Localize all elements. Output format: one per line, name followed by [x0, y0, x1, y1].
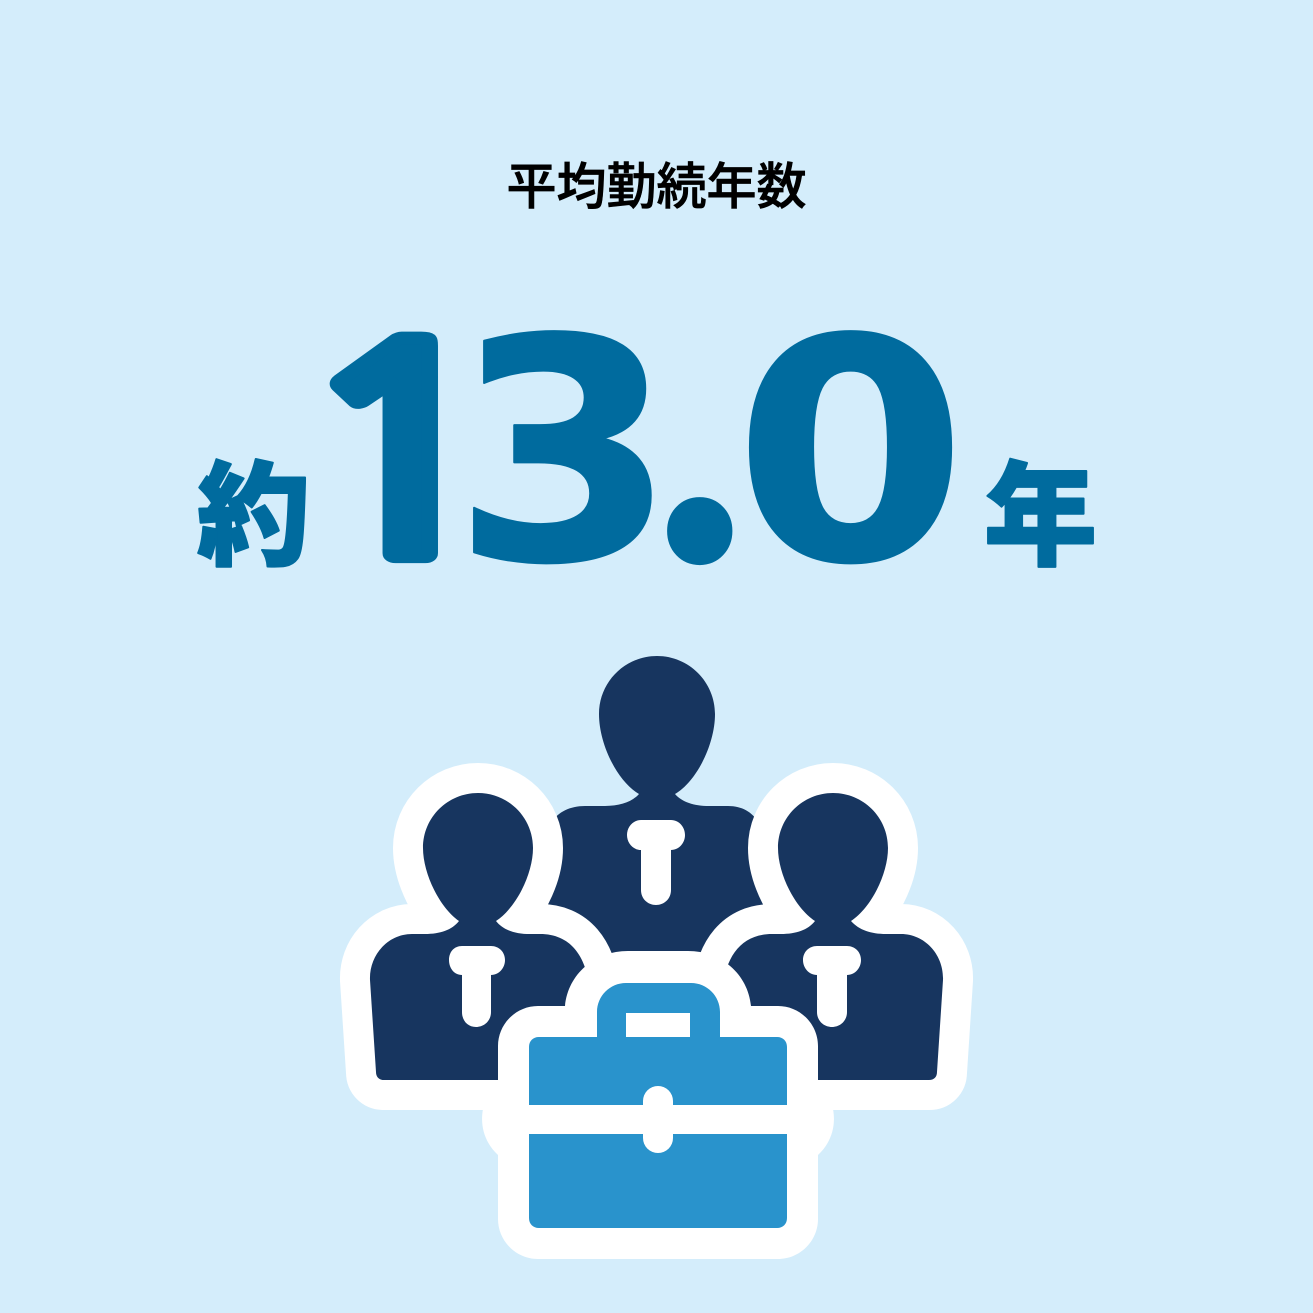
headline value: about 13.0 years — [197, 218, 1097, 644]
person: front left — [370, 793, 590, 1080]
title: 平均勤続年数 — [506, 159, 806, 215]
number: 13.0: 1 — [290, 315, 514, 600]
icon: briefcase — [482, 951, 834, 1259]
number: 13.0: . — [648, 218, 751, 644]
person: back centre — [540, 656, 770, 960]
person: front right — [722, 793, 943, 1080]
number: 13.0: 0 — [734, 274, 967, 632]
icon: three business people with briefcase — [370, 656, 943, 1259]
number: 13.0 — [290, 218, 967, 644]
suffix: years: 年 — [984, 454, 1097, 580]
prefix: about: 約 — [197, 454, 310, 580]
number: 13.0: 3 — [453, 275, 676, 632]
